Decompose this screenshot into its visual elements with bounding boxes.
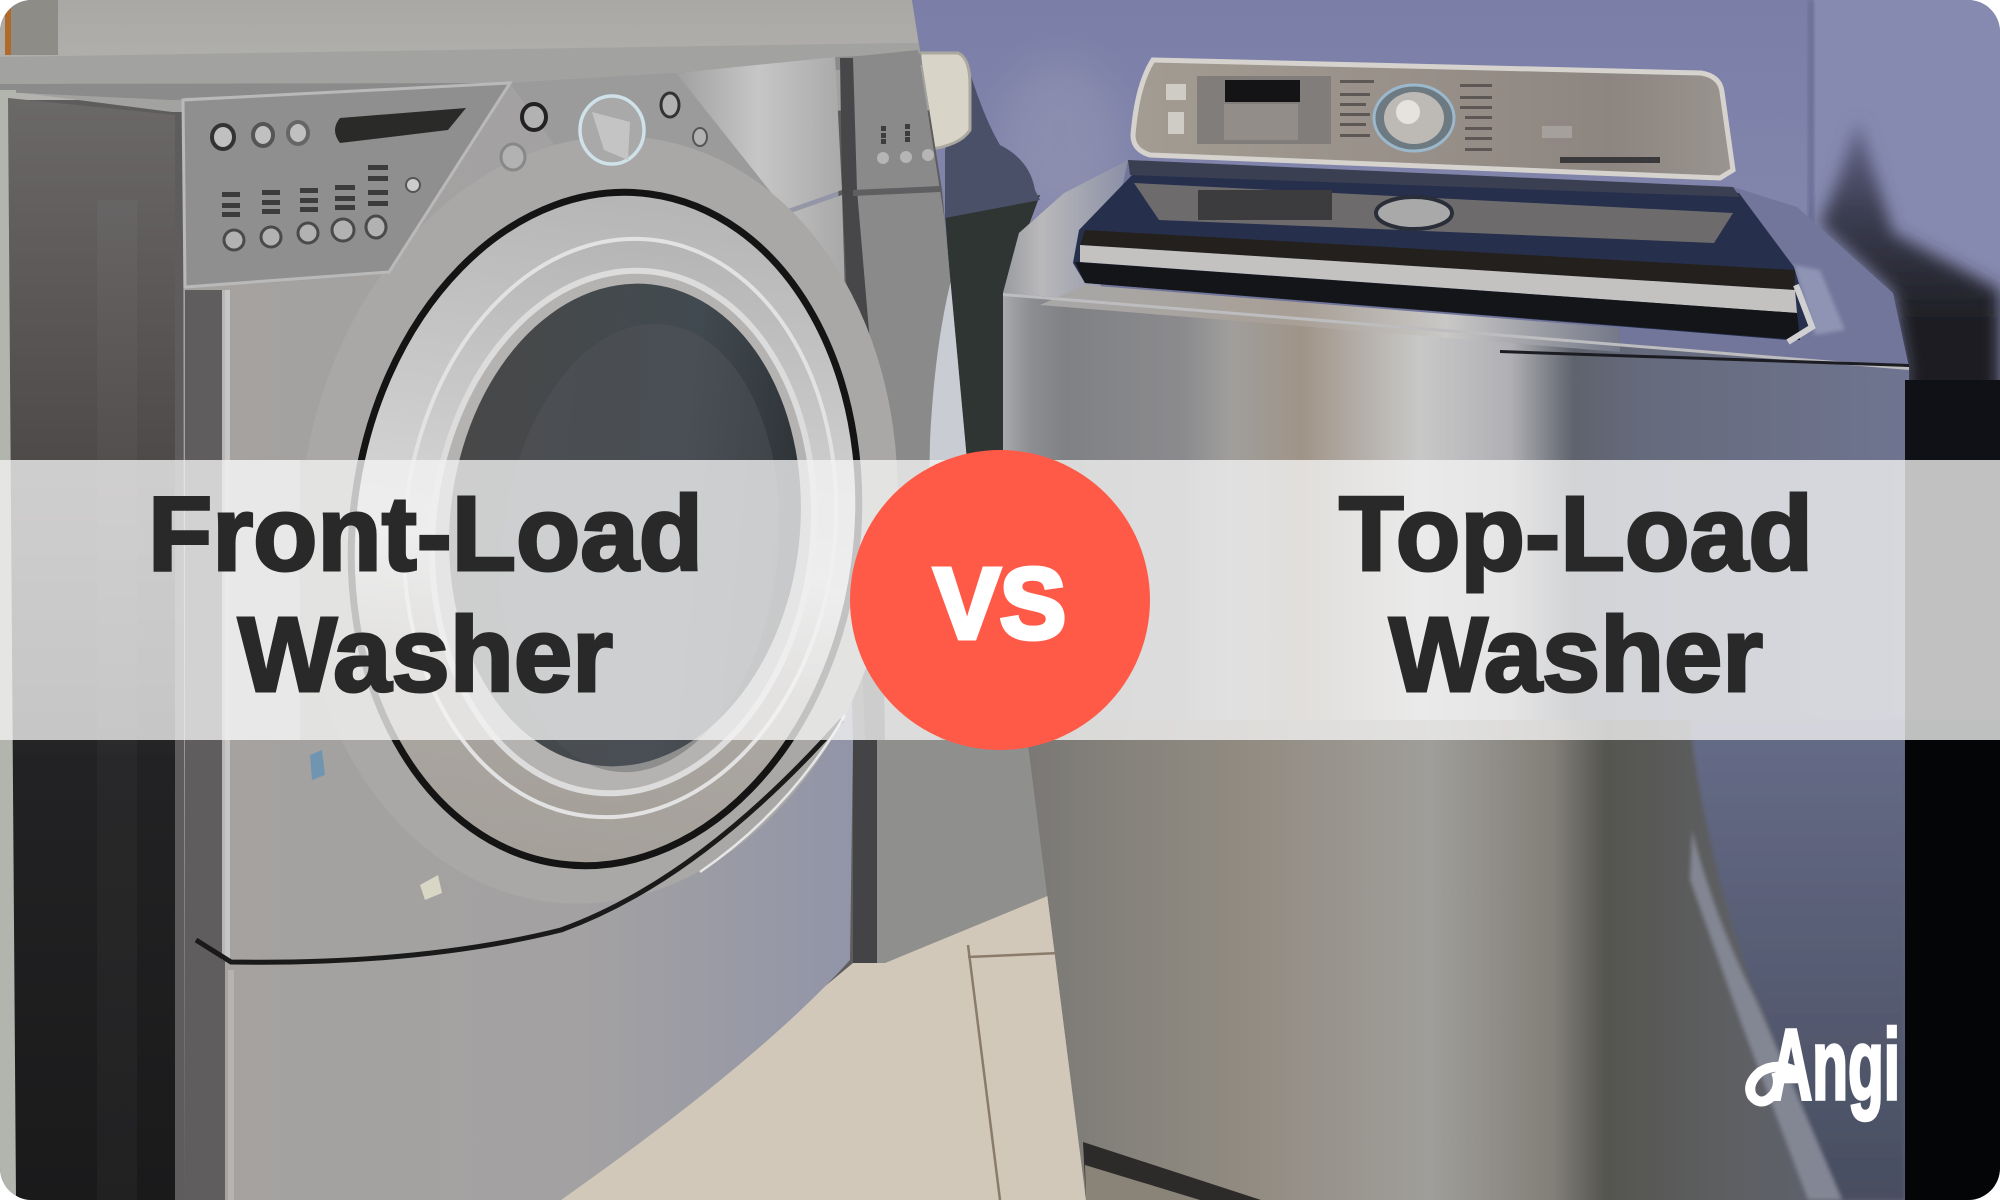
heading: top-load washer: Washer [1389, 596, 1763, 714]
blue side reflection [1690, 720, 1905, 1200]
ring [405, 236, 835, 820]
vs badge: VS [934, 548, 1066, 660]
washer body upper [1003, 293, 1909, 760]
lid silver strip [1080, 245, 1797, 313]
top buttons [212, 122, 308, 149]
jar [8, 0, 58, 55]
heading: front-load washer [148, 475, 703, 714]
glass lid [1073, 173, 1812, 340]
countertop [0, 43, 930, 112]
right wall corner [1814, 0, 2000, 100]
column indicators [881, 124, 910, 144]
right column [840, 50, 1050, 963]
floor [561, 895, 1100, 1200]
wall shadow [1814, 126, 2000, 380]
dial [1374, 85, 1454, 151]
control panel [183, 83, 510, 287]
washer body lower [1003, 720, 1909, 1200]
heading: front-load washer: Washer [238, 596, 613, 714]
sticker labels [310, 750, 325, 780]
inner rim [406, 251, 840, 813]
lid top chrome strip [1128, 160, 1740, 197]
door glass [425, 266, 825, 784]
white curved panel [930, 282, 966, 740]
heading: top-load washer [1339, 475, 1813, 714]
wall [0, 0, 928, 100]
gasket [348, 188, 862, 870]
left wall sliver [0, 90, 16, 1200]
plinth and floor [1083, 1142, 1261, 1200]
panel button block [1197, 76, 1331, 144]
lid dark band [1080, 230, 1795, 290]
panel labels [1340, 80, 1660, 163]
lid shoulders [1003, 160, 1909, 367]
door bezel [194, 138, 896, 965]
main dial [580, 96, 644, 164]
control panel [1133, 60, 1733, 178]
heading: front-load washer: Front-Load [148, 475, 703, 593]
lid reflection [1134, 183, 1733, 243]
base fill [0, 0, 1100, 1200]
translucent title band [0, 460, 2000, 740]
panel screen [1225, 80, 1300, 102]
floor tile lines [968, 945, 1060, 1200]
vs badge [850, 450, 1150, 750]
neighbouring washer [920, 53, 1040, 470]
indicator lights [222, 165, 388, 217]
bottom buttons [224, 216, 386, 250]
logo: Angi: Angi [1770, 1009, 1900, 1121]
front face [183, 57, 853, 1200]
side panel [8, 98, 175, 1200]
heading: top-load washer: Top-Load [1339, 475, 1813, 593]
pedestal seam [196, 720, 842, 962]
photo: front-load washer [0, 0, 1100, 1200]
photo: top-load washer [880, 0, 2000, 1200]
display [335, 108, 466, 143]
silver side panel [686, 57, 845, 282]
small knobs [501, 93, 707, 170]
logo: Angi [1750, 1009, 1900, 1121]
diagonal reflection [1690, 830, 1842, 1200]
dark right edge [1905, 720, 2000, 1200]
